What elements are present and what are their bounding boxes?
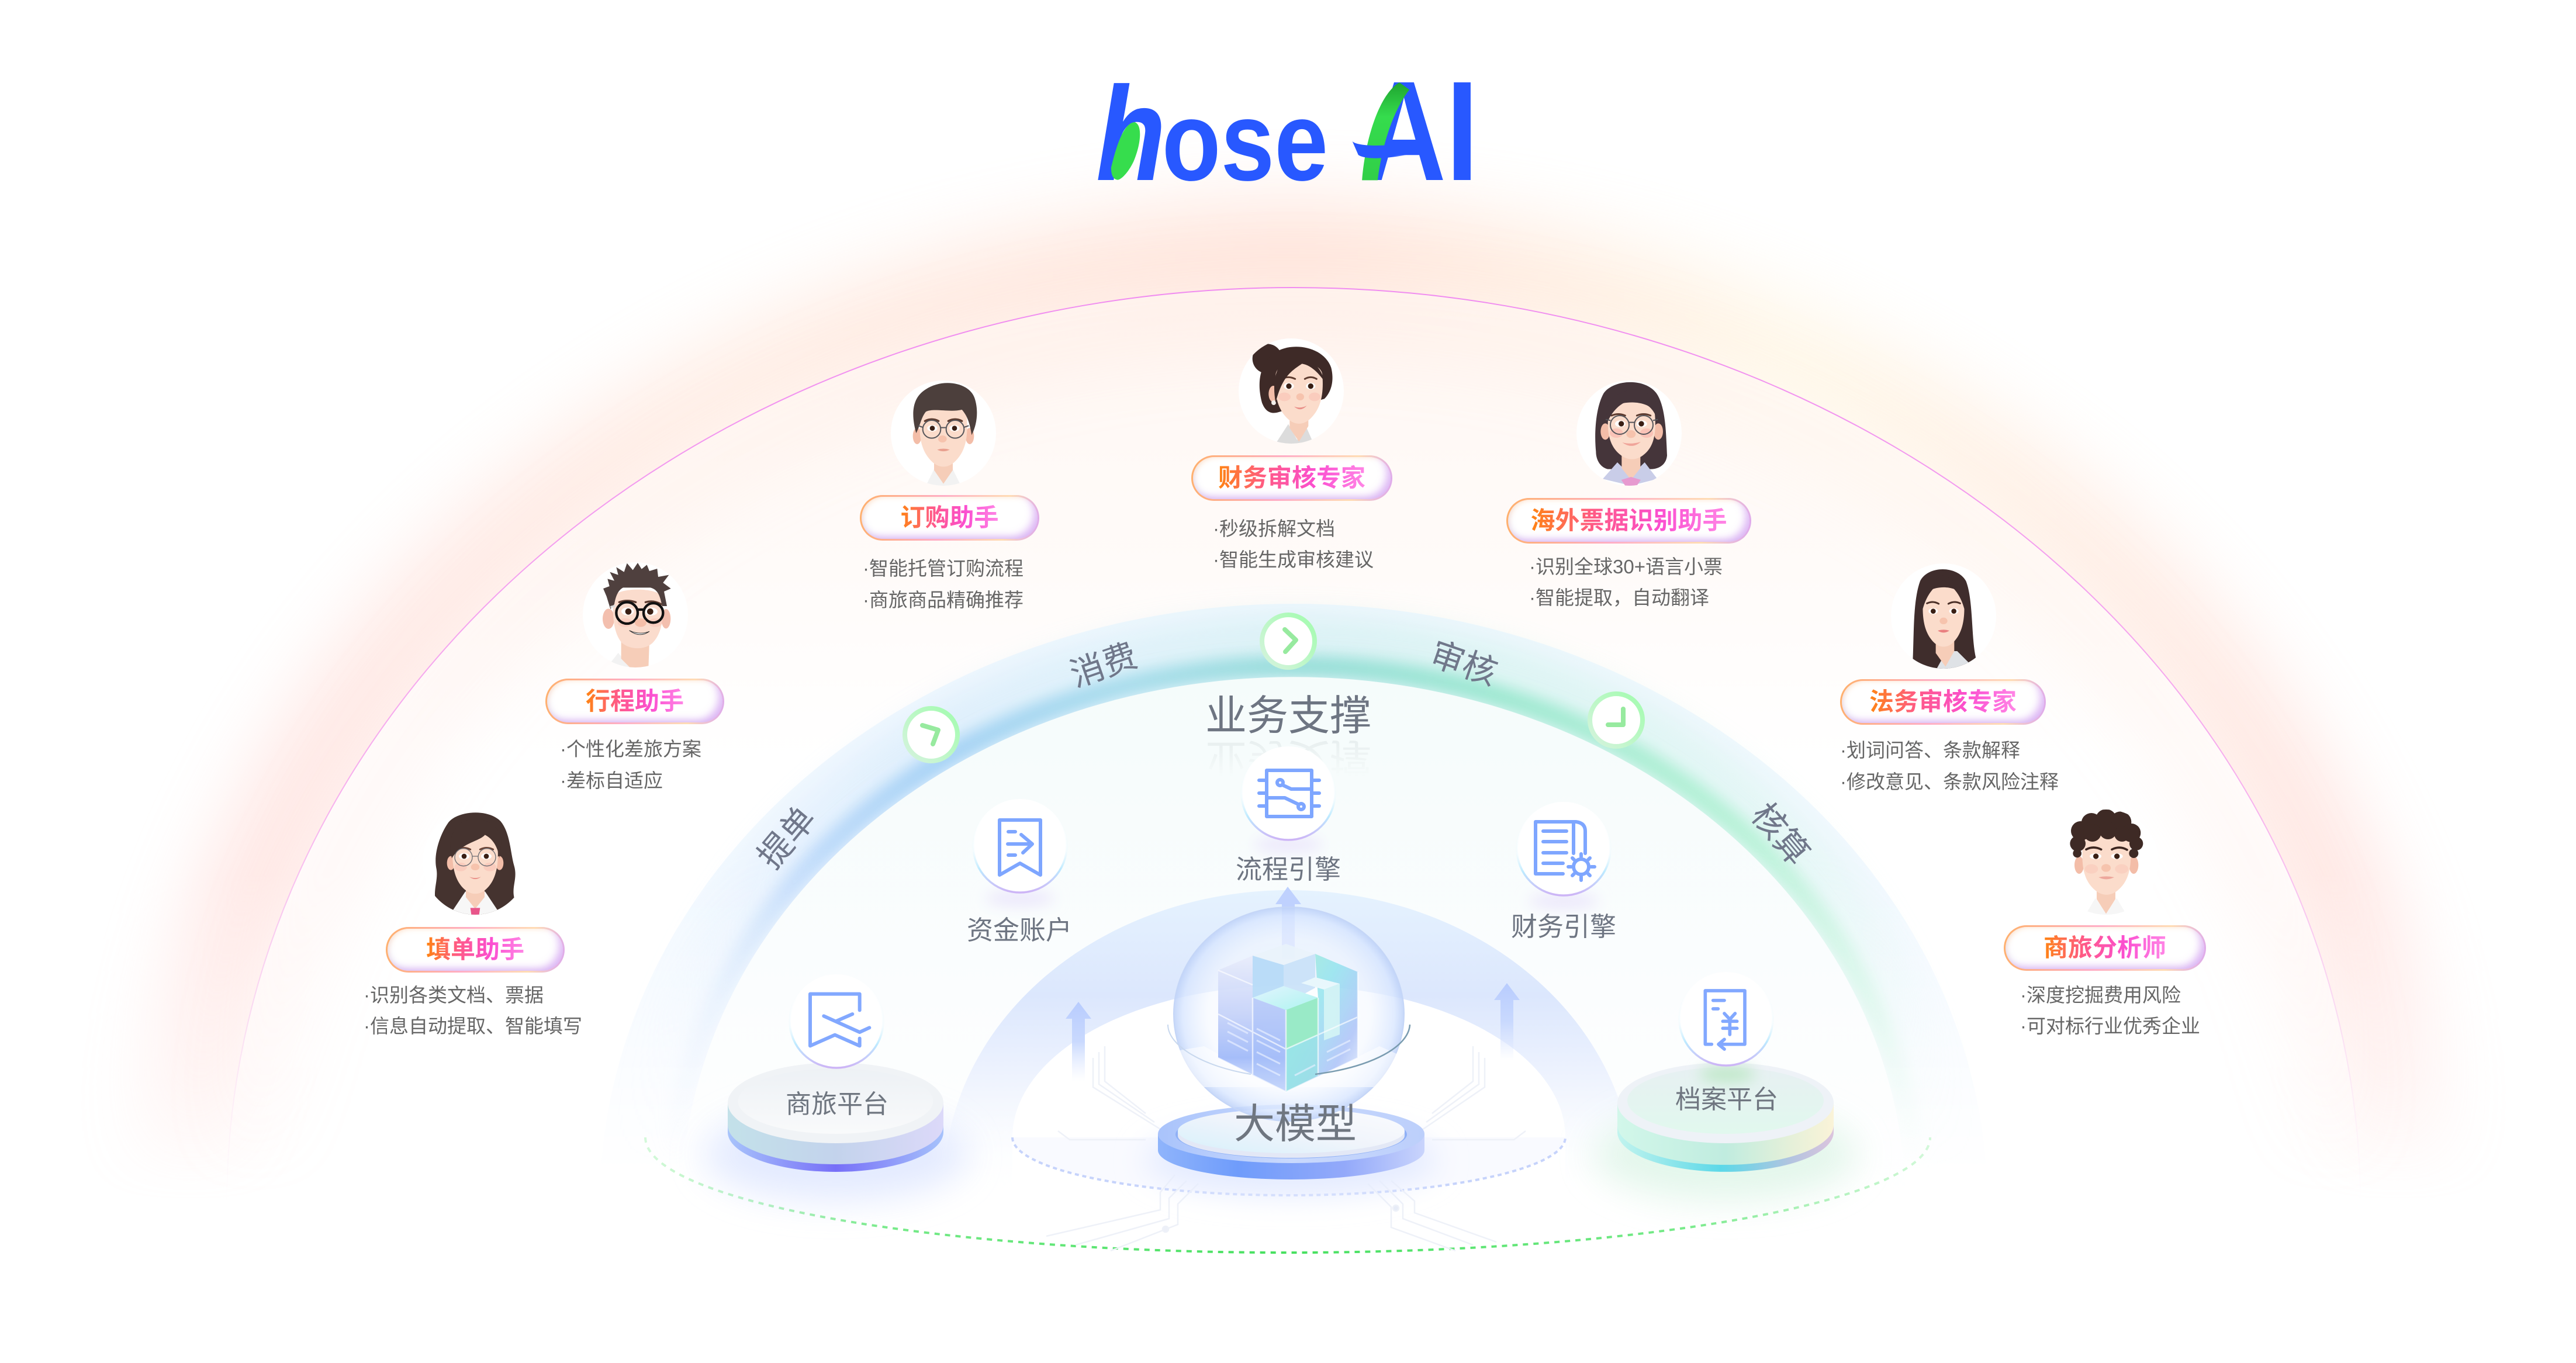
persona: 商旅分析师: [2004, 810, 2206, 1042]
node: 流程引擎: [1236, 746, 1341, 884]
bullet: ·商旅商品精确推荐: [863, 589, 1024, 611]
icon: bookmark arrow: [1000, 820, 1040, 875]
heading: 业务支撑: [1205, 693, 1371, 781]
green dashed ellipse: [645, 1137, 1930, 1253]
arrow centre: [1275, 887, 1301, 959]
bullet: ·信息自动提取、智能填写: [364, 1015, 582, 1037]
node: 资金账户: 资金账户: [967, 915, 1072, 945]
label: 提单: 提单: [751, 800, 824, 876]
arrow left: [1066, 1002, 1091, 1081]
bullet: ·修改意见、条款风险注释: [1840, 771, 2059, 793]
bullet: ·个性化差旅方案: [560, 738, 701, 760]
badge: 填单助手: 填单助手: [426, 936, 524, 963]
sphere with data cubes: [1168, 887, 1410, 1121]
label: 消费: 消费: [1066, 636, 1142, 694]
step marker right: [1590, 694, 1643, 746]
avatar: 填单助手: [423, 810, 528, 915]
outer glow band: [189, 252, 2398, 1204]
node: 财务引擎: [1511, 802, 1616, 942]
node: 流程引擎: 流程引擎: [1236, 855, 1341, 884]
data cubes: [1218, 944, 1358, 1092]
arrow right: [1494, 983, 1520, 1061]
label: 核算: 核算: [1744, 796, 1817, 873]
step marker left: [905, 708, 957, 761]
platform: 商旅平台: [704, 974, 967, 1201]
node: 资金账户: [967, 799, 1072, 945]
platform: 商旅平台: 商旅平台: [786, 1090, 888, 1119]
bullet: ·秒级拆解文档: [1213, 518, 1335, 539]
node: 财务引擎: 财务引擎: [1511, 912, 1616, 942]
avatar: 行程助手: [583, 562, 688, 667]
persona: 财务审核专家: [1191, 338, 1392, 575]
badge: 行程助手: [545, 679, 724, 724]
model arch: [944, 890, 1634, 1195]
platform: 档案平台: 档案平台: [1675, 1085, 1778, 1114]
heading: 业务支撑: 业务支撑: [1205, 693, 1371, 739]
badge: 财务审核专家: [1191, 455, 1392, 501]
bullet: ·深度挖掘费用风险: [2020, 984, 2181, 1006]
platform: 档案平台: [1594, 972, 1857, 1201]
bullet: ·差标自适应: [560, 770, 663, 791]
badge: 商旅分析师: [2004, 925, 2206, 971]
outer dome: [227, 288, 2360, 1204]
persona: 海外票据识别助手: [1506, 380, 1751, 613]
persona: 订购助手: [860, 380, 1039, 615]
bullet: ·智能托管订购流程: [863, 558, 1024, 579]
persona: 行程助手: [545, 562, 724, 795]
persona: 法务审核专家: [1840, 563, 2062, 797]
label: 审核: 审核: [1425, 635, 1502, 693]
badge: 填单助手: [386, 927, 565, 973]
band labels: [751, 635, 1817, 876]
avatar: 法务审核专家: [1891, 563, 1996, 669]
avatar: 商旅分析师: [2053, 810, 2159, 915]
heading: 业务支撑: 业务支撑: [1205, 735, 1371, 781]
bullet: ·识别全球30+语言小票: [1529, 556, 1723, 577]
bullet: ·识别各类文档、票据: [364, 984, 544, 1006]
icon: document gear: [1536, 822, 1595, 880]
avatar: 财务审核专家: [1239, 338, 1344, 444]
avatar: 海外票据识别助手: [1576, 380, 1682, 486]
step marker centre: [1262, 615, 1315, 667]
badge: 订购助手: 订购助手: [900, 504, 998, 531]
badge: 法务审核专家: [1840, 679, 2046, 725]
bullet: ·划词问答、条款解释: [1840, 739, 2020, 761]
logo: hose AI: [1096, 52, 1478, 210]
bullet: ·可对标行业优秀企业: [2020, 1015, 2200, 1037]
middle band arch: [636, 604, 1949, 1109]
badge: 海外票据识别助手: 海外票据识别助手: [1530, 507, 1727, 534]
badge: 海外票据识别助手: [1506, 498, 1751, 544]
badge: 行程助手: 行程助手: [586, 687, 684, 715]
badge: 订购助手: [860, 495, 1039, 541]
badge: 商旅分析师: 商旅分析师: [2043, 934, 2166, 961]
badge: 财务审核专家: 财务审核专家: [1218, 464, 1365, 492]
label: 大模型: 大模型: [1234, 1101, 1357, 1147]
badge: 法务审核专家: 法务审核专家: [1869, 688, 2017, 715]
logo: hose AI: hose: [1096, 60, 1328, 209]
circuit lines: [1046, 1046, 1526, 1251]
icon: flow switch: [1259, 770, 1319, 817]
icon badge: [790, 974, 883, 1068]
bullet: ·智能生成审核建议: [1213, 549, 1374, 570]
pedestal: [1145, 1105, 1437, 1195]
bullet: ·智能提取，自动翻译: [1529, 587, 1709, 608]
avatar: 订购助手: [891, 380, 996, 486]
icon badge: [1679, 972, 1773, 1066]
logo: hose AI: AI: [1362, 52, 1478, 210]
persona: 填单助手: [364, 812, 582, 1037]
